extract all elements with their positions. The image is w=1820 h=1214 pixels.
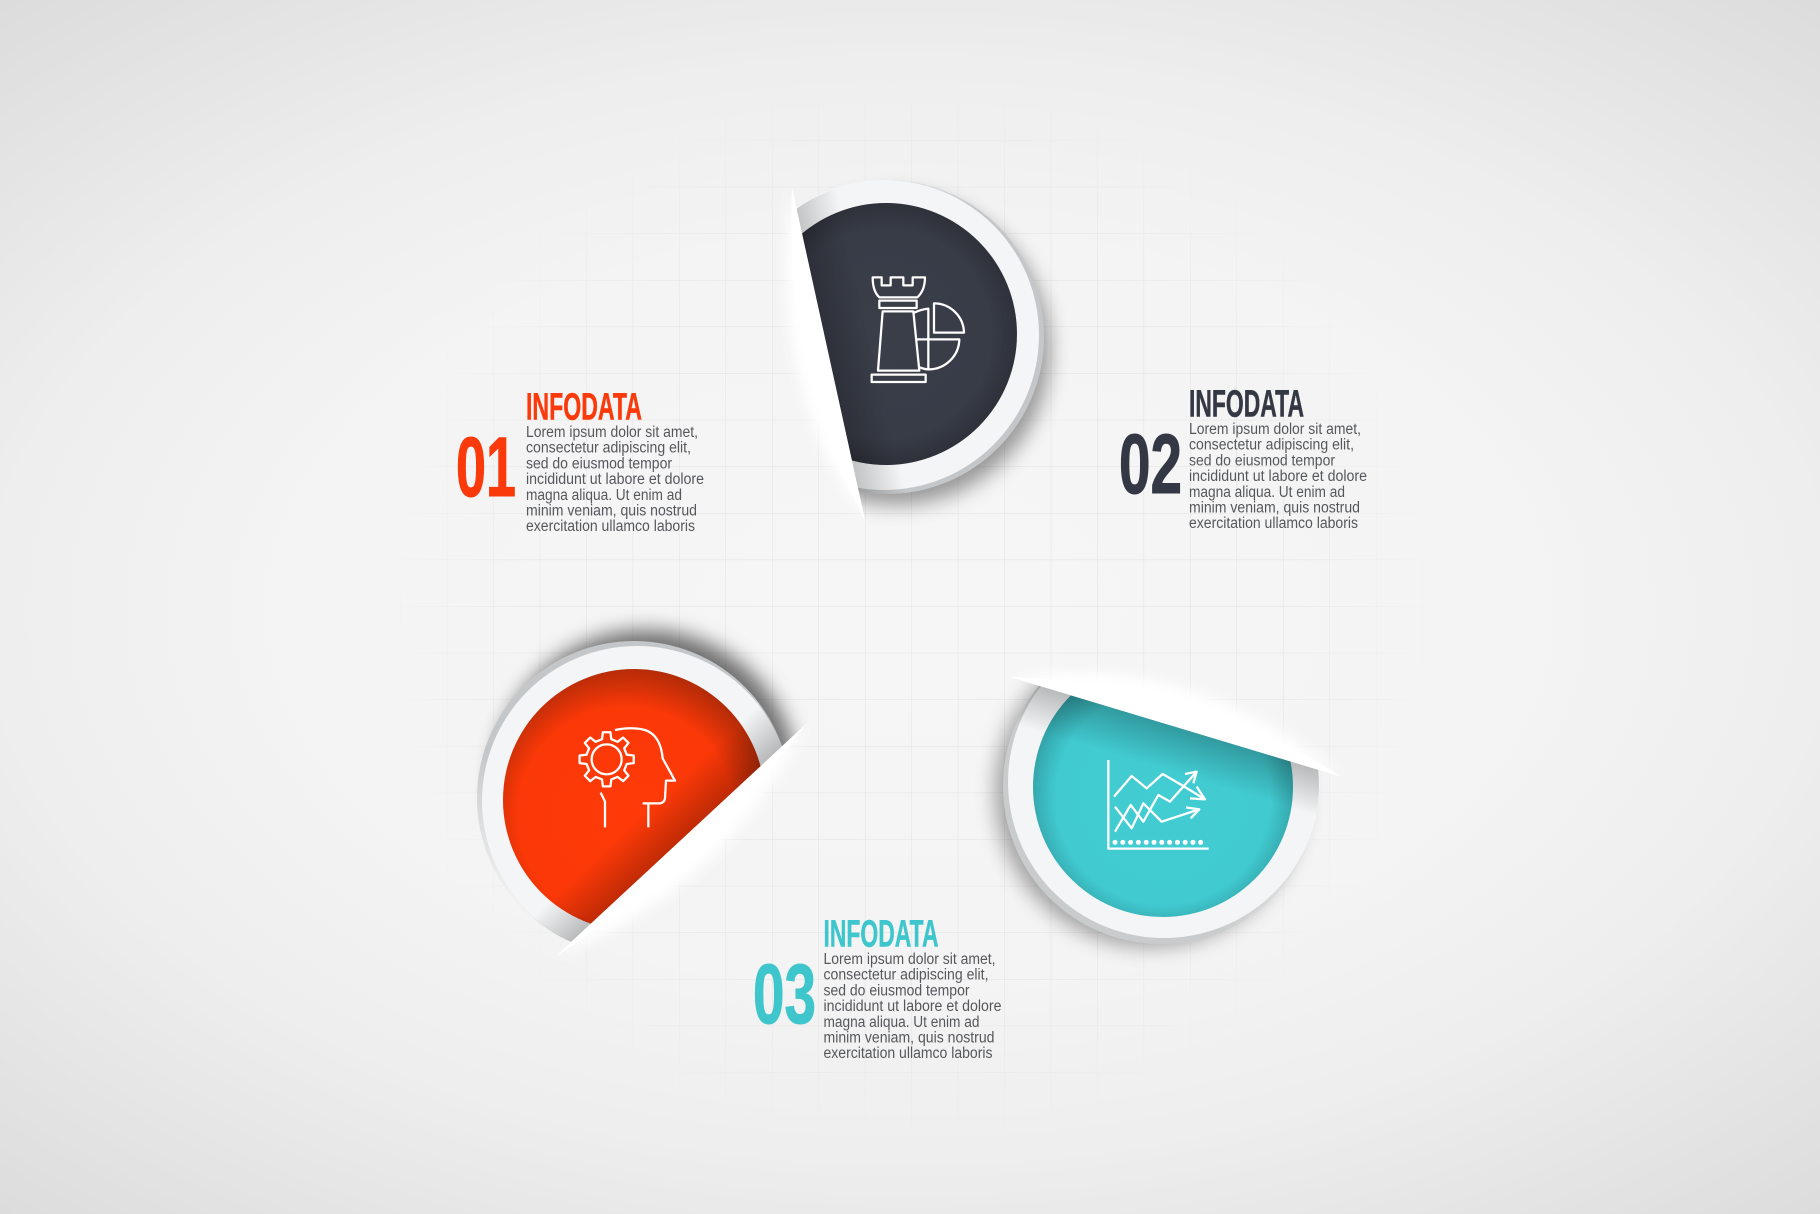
- body 01: sed do eiusmod tempor: [526, 455, 672, 472]
- body 03: [824, 951, 1002, 1062]
- body 02: minim veniam, quis nostrud: [1189, 500, 1360, 516]
- body 02: Lorem ipsum dolor sit amet,: [1189, 421, 1361, 438]
- text block 03: [753, 914, 1002, 1062]
- body 03: sed do eiusmod tempor: [824, 982, 970, 999]
- number 02: 02: [1119, 417, 1182, 511]
- disc shadow: [494, 630, 798, 934]
- number 01: 01: [456, 420, 516, 514]
- body 01: incididunt ut labore et dolore: [526, 471, 704, 488]
- body 02: sed do eiusmod tempor: [1189, 452, 1335, 469]
- disc shadow: [995, 637, 1305, 947]
- body 02: consectetur adipiscing elit,: [1189, 437, 1354, 454]
- body 01: exercitation ullamco laboris: [526, 518, 695, 535]
- number 03: 03: [753, 947, 816, 1041]
- icon: chess rook with pie chart: [872, 277, 964, 382]
- heading 02: INFODATA: [1189, 384, 1304, 426]
- disc body: [477, 641, 792, 956]
- heading 01: INFODATA: [526, 386, 642, 428]
- disc body: [796, 180, 1044, 494]
- body 02: [1189, 421, 1367, 532]
- heading 03: INFODATA: [824, 914, 938, 956]
- paper flap: [787, 188, 865, 520]
- body 01: magna aliqua. Ut enim ad: [526, 487, 682, 504]
- icon: head with gear: [580, 728, 675, 827]
- panel: dark circle with strategy icon: [783, 180, 1062, 518]
- disc shadow: [858, 187, 1062, 518]
- body 03: minim veniam, quis nostrud: [824, 1030, 994, 1046]
- body 01: Lorem ipsum dolor sit amet,: [526, 424, 698, 441]
- panel: teal circle with chart icon: [995, 626, 1342, 947]
- body 03: exercitation ullamco laboris: [824, 1045, 993, 1062]
- panel: red circle with head and gear icon: [477, 630, 807, 957]
- body 03: magna aliqua. Ut enim ad: [824, 1014, 980, 1031]
- body 03: consectetur adipiscing elit,: [824, 967, 988, 984]
- text block 02: [1119, 384, 1367, 532]
- icon: line chart with arrows: [1108, 760, 1209, 849]
- body 02: exercitation ullamco laboris: [1189, 515, 1358, 532]
- body 01: consectetur adipiscing elit,: [526, 440, 691, 457]
- body 03: incididunt ut labore et dolore: [824, 998, 1002, 1015]
- body 01: minim veniam, quis nostrud: [526, 502, 697, 520]
- paper flap: [1010, 672, 1342, 777]
- body 03: Lorem ipsum dolor sit amet,: [824, 951, 996, 968]
- body 02: incididunt ut labore et dolore: [1189, 468, 1367, 485]
- body 01: [526, 424, 704, 535]
- paper flap: [555, 723, 807, 957]
- text block 01: [456, 386, 704, 535]
- body 02: magna aliqua. Ut enim ad: [1189, 484, 1345, 501]
- disc body: [1003, 686, 1320, 944]
